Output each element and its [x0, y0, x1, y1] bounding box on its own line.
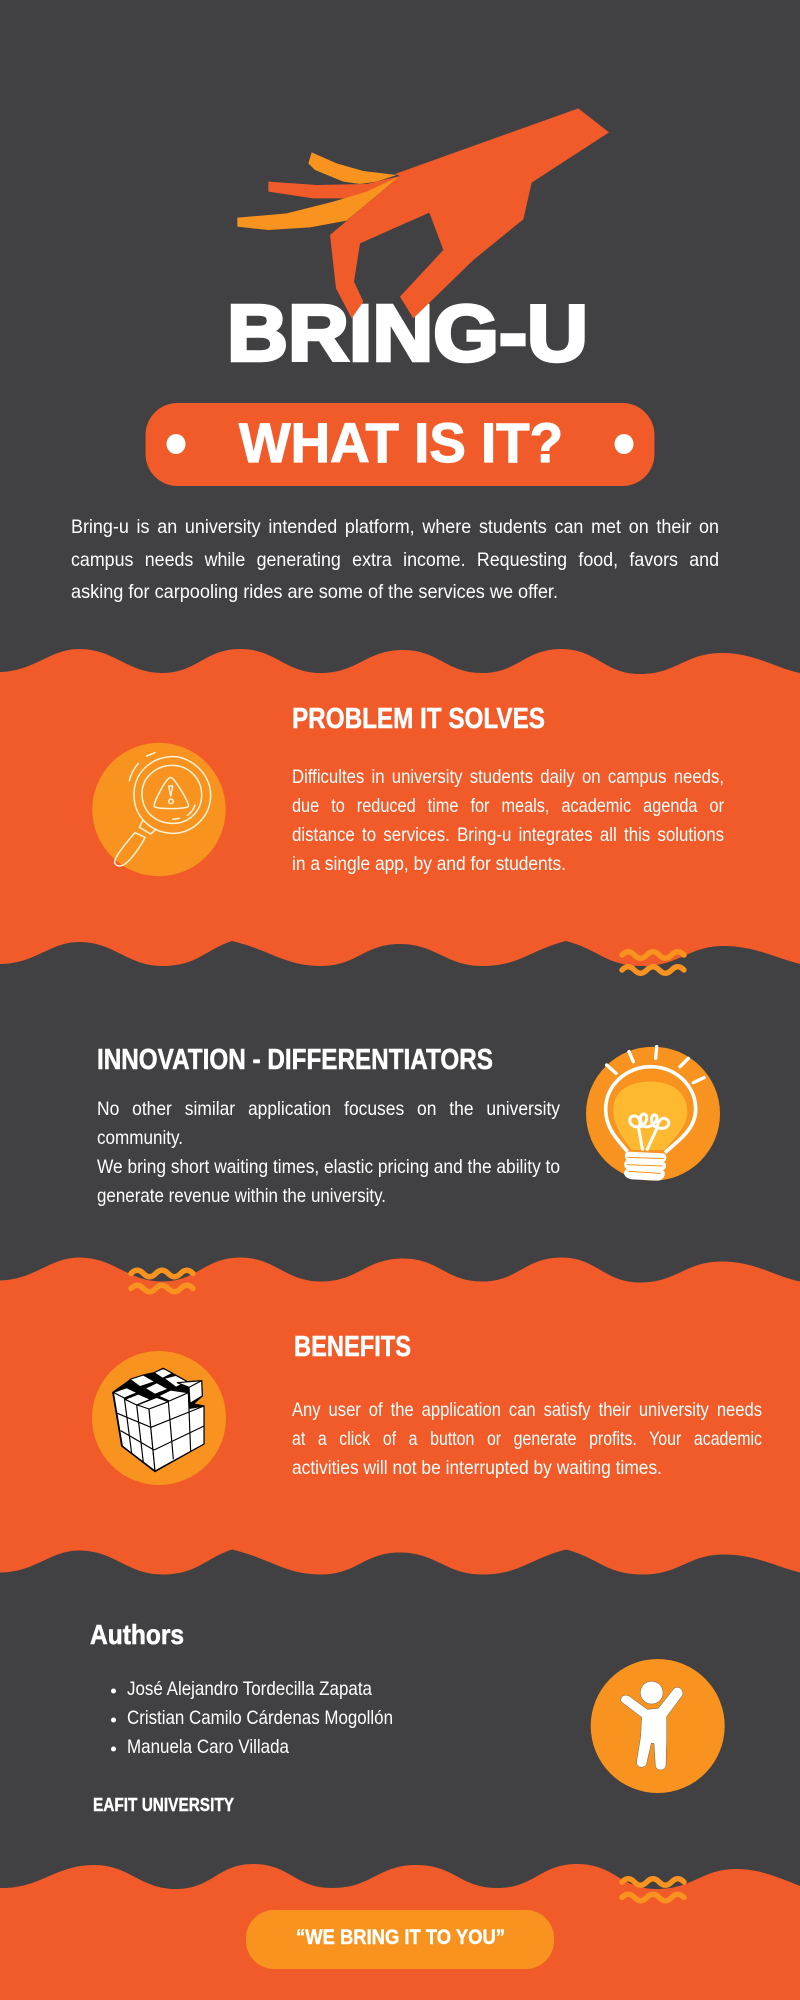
slogan button: “WE BRING IT TO YOU”: [296, 1926, 505, 1949]
logo wordmark: BRING-U: [227, 288, 588, 378]
problem text: due to reduced time for meals, academic agenda or: [292, 795, 724, 817]
panel: benefits: [92, 1331, 762, 1485]
icon: rubik cube: [92, 1351, 226, 1485]
heading: problem it solves: PROBLEM IT SOLVES: [292, 703, 545, 735]
title pill: what is it: [146, 403, 654, 486]
intro text: [71, 516, 719, 603]
innovation text: community.: [97, 1127, 183, 1149]
innovation text: No other similar application focuses on the university: [97, 1098, 560, 1120]
author list: Manuela Caro Villada: [127, 1736, 289, 1758]
innovation text: We bring short waiting times, elastic pricing and the ability to: [97, 1156, 560, 1178]
benefits text: activities will not be interrupted by waiting times.: [292, 1457, 662, 1479]
squiggle decoration 1: [622, 952, 684, 973]
intro text: Bring-u is an university intended platform, where students can met on their on: [71, 516, 719, 538]
problem text: in a single app, by and for students.: [292, 853, 566, 875]
title pill: what is it: WHAT IS IT?: [239, 411, 563, 474]
author list: [111, 1678, 393, 1758]
panel: problem it solves: [92, 703, 724, 876]
logo: Bring-U: [227, 108, 609, 377]
heading: authors: Authors: [90, 1619, 184, 1650]
intro text: campus needs while generating extra income. Requesting food, favors and: [71, 549, 719, 571]
heading: benefits: BENEFITS: [294, 1331, 411, 1363]
author list: José Alejandro Tordecilla Zapata: [127, 1678, 372, 1700]
problem text: Difficultes in university students daily on campus needs,: [292, 766, 724, 788]
problem text: distance to services. Bring-u integrates all this solutions: [292, 824, 724, 846]
problem text: [292, 766, 724, 875]
squiggle decoration 3: [622, 1879, 684, 1901]
panel: benefits band background: [0, 1258, 800, 1574]
panel: problem band background: [0, 649, 800, 966]
slogan button: [246, 1910, 554, 1969]
innovation text: [97, 1098, 560, 1207]
panel: footer band: [0, 1864, 800, 2000]
panel: authors: [90, 1619, 725, 1815]
intro text: asking for carpooling rides are some of the services we offer.: [71, 581, 558, 603]
benefits text: [292, 1399, 762, 1479]
squiggle decoration 2: [131, 1270, 193, 1292]
innovation text: generate revenue within the university.: [97, 1185, 386, 1207]
university name: EAFIT UNIVERSITY: [93, 1794, 235, 1815]
icon: magnifier with warning: [92, 743, 226, 876]
icon: person with raised arms: [591, 1659, 725, 1793]
heading: innovation: INNOVATION - DIFFERENTIATORS: [97, 1044, 493, 1076]
logo hand icon: [237, 108, 609, 318]
author list: Cristian Camilo Cárdenas Mogollón: [127, 1707, 393, 1729]
panel: innovation differentiators: [97, 1044, 720, 1207]
icon: light bulb: [586, 1047, 720, 1181]
